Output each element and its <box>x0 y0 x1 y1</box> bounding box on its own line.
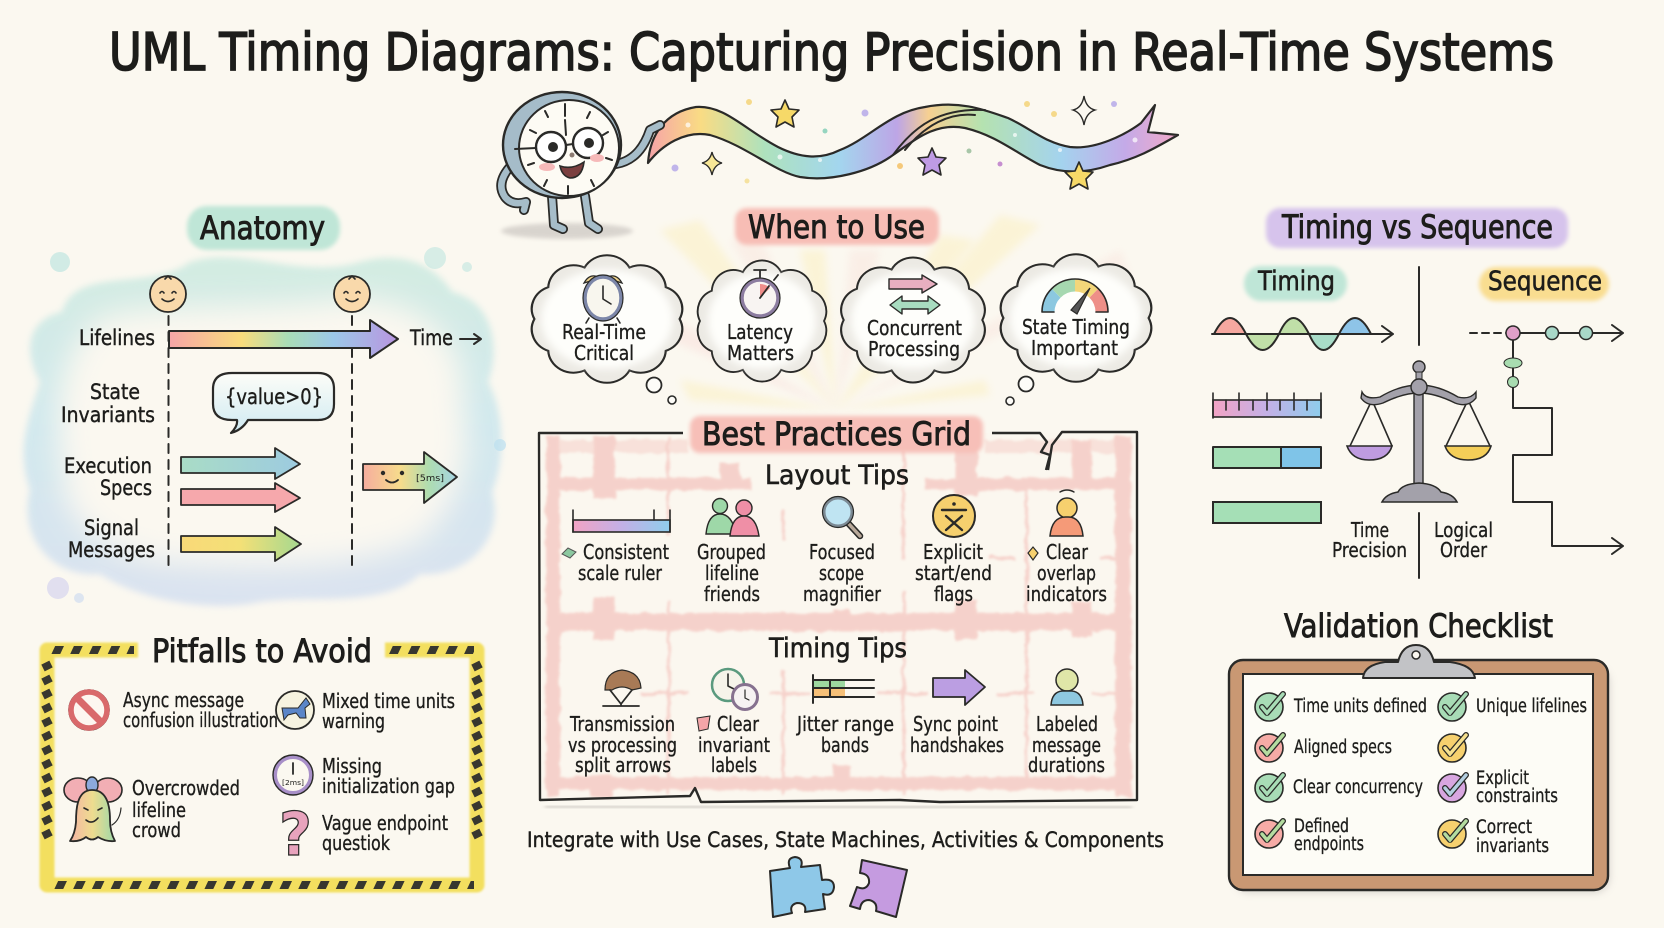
check: unlabeled yellow <box>1438 734 1466 762</box>
watercolor cloud background <box>24 247 506 606</box>
text: mixed time units: warning <box>322 709 385 733</box>
label: Execution Specs: Execution <box>64 454 152 478</box>
text: mixed time units: Mixed time units <box>322 689 455 713</box>
text: mixed time units <box>322 689 455 733</box>
tip: focused scope magnifier: Focused <box>809 540 875 564</box>
panel: anatomy <box>24 206 506 606</box>
text: overcrowded lifeline: crowd <box>132 818 181 842</box>
subheading: Layout Tips: Layout Tips <box>765 460 909 491</box>
label: Signal Messages <box>68 516 155 562</box>
check: explicit constraints: Explicit <box>1476 768 1529 789</box>
text: vague endpoint <box>322 811 448 855</box>
text: overcrowded lifeline <box>132 776 240 842</box>
label: Execution Specs <box>64 454 152 500</box>
balance scale <box>1347 361 1491 502</box>
tip: clear invariant labels: Clear <box>717 712 760 736</box>
rainbow timeline ribbon <box>648 105 1178 178</box>
icon: gauge <box>1042 279 1108 314</box>
tip: transmission vs processing <box>568 670 677 777</box>
thought cloud: concurrent processing: Concurrent <box>867 316 962 340</box>
tip: labeled message durations <box>1028 669 1105 777</box>
check: time units defined: Time units defined <box>1293 696 1427 717</box>
label: Signal Messages: Messages <box>68 538 155 562</box>
label: State Invariants: State <box>90 380 140 404</box>
tip: clear overlap indicators <box>1026 490 1107 606</box>
thought cloud: real-time critical <box>532 255 682 404</box>
panel: timing vs sequence <box>1212 208 1623 578</box>
lifeline heads and dashed lines <box>150 276 370 568</box>
text: missing initialization <box>322 754 455 798</box>
icon: overcrowded ghost <box>64 777 122 841</box>
red gingham grid wash <box>546 436 1131 797</box>
thought cloud: state timing important: State Timing <box>1022 315 1130 339</box>
tip: consistent scale ruler <box>562 510 670 585</box>
check: unique lifelines <box>1438 693 1587 721</box>
clipboard <box>1229 645 1610 893</box>
tip: clear invariant labels: invariant <box>698 733 770 757</box>
sunburst behind When to Use <box>640 215 1130 410</box>
tip: focused scope magnifier: scope <box>819 561 864 585</box>
thought cloud: latency matters: Latency <box>727 320 793 344</box>
text: async message: confusion illustration <box>123 708 278 732</box>
label: logical order: Logical <box>1434 518 1493 542</box>
heading: Timing vs Sequence: Timing vs Sequence <box>1281 208 1553 246</box>
check: unique lifelines: Unique lifelines <box>1476 696 1587 717</box>
text: overcrowded lifeline: lifeline <box>132 798 186 822</box>
clock character <box>501 92 660 239</box>
timing waveform <box>1212 318 1393 350</box>
panel: pitfalls to avoid <box>43 632 481 885</box>
tip: focused scope magnifier: magnifier <box>803 582 882 606</box>
thought cloud: concurrent processing: Processing <box>868 337 960 361</box>
check: aligned specs: Aligned specs <box>1294 737 1392 758</box>
heading: When to Use: When to Use <box>748 208 925 246</box>
signal arrow <box>181 527 301 561</box>
check: correct invariants: Correct <box>1476 817 1532 838</box>
panel: when to use <box>532 208 1151 405</box>
check: defined endpoints: endpoints <box>1294 834 1364 855</box>
heading: Validation Checklist: Validation Checklist <box>1284 607 1553 645</box>
check: aligned specs <box>1255 734 1392 762</box>
smiling 5ms message arrow: [5ms] <box>416 474 444 484</box>
speech bubble: value constraint: {value>0} <box>225 385 323 409</box>
check: time units defined <box>1255 693 1427 721</box>
panel: validation checklist <box>1229 607 1610 893</box>
tip: grouped lifeline friends <box>697 498 766 606</box>
tip: grouped lifeline friends: Grouped <box>697 540 766 564</box>
tip: transmission vs processing: split arrows <box>575 753 671 777</box>
icon: puzzle pieces <box>770 857 907 917</box>
center divider <box>1418 267 1420 345</box>
check: explicit constraints <box>1438 768 1558 807</box>
label: State Invariants: Invariants <box>61 403 155 427</box>
check: clear concurrency: Clear concurrency <box>1293 777 1423 798</box>
label: Time: Time <box>409 326 453 350</box>
thought cloud: real-time critical: Critical <box>574 341 634 365</box>
subheading: Timing Tips: Timing Tips <box>768 633 907 664</box>
icon: question mark: ? <box>279 800 312 870</box>
thought cloud: state timing important: Important <box>1031 336 1118 360</box>
tip: jitter range bands: Jitter range <box>795 712 894 736</box>
panel: best practices grid <box>539 415 1137 808</box>
thought cloud: latency matters: Matters <box>727 341 794 365</box>
tip: transmission vs processing: vs processing <box>568 733 677 757</box>
execution arrows <box>181 448 300 512</box>
check: correct invariants <box>1438 817 1549 857</box>
tip: clear invariant labels <box>697 669 770 777</box>
tip: sync point handshakes <box>910 670 1004 757</box>
check: clear concurrency <box>1255 774 1423 802</box>
label: time precision <box>1332 518 1407 562</box>
icon: parallel arrows <box>889 275 940 314</box>
clock mascot with rainbow ribbon <box>501 92 1178 239</box>
time arrow <box>169 320 398 358</box>
tip: grouped lifeline friends: lifeline <box>705 561 759 585</box>
sequence lifeline diagram <box>1470 325 1623 554</box>
integration caption: Integrate with Use Cases, State Machines, Activities & Components <box>527 828 1164 852</box>
label: Execution Specs: Specs <box>100 476 152 500</box>
tip: jitter range bands <box>795 675 894 757</box>
tip: transmission vs processing: Transmission <box>569 712 675 736</box>
timing bar: full <box>1213 502 1321 523</box>
icon: stopwatch <box>740 270 780 318</box>
check: defined endpoints <box>1255 816 1364 855</box>
tip: sync point handshakes: Sync point <box>913 712 998 736</box>
tip: clear overlap indicators: indicators <box>1026 582 1107 606</box>
heading: Pitfalls to Avoid: Pitfalls to Avoid <box>152 632 372 670</box>
cracked frame outline <box>539 432 1137 808</box>
tip: grouped lifeline friends: friends <box>704 582 760 606</box>
speech bubble: value constraint <box>213 373 334 433</box>
tip: labeled message durations: Labeled <box>1036 712 1098 736</box>
heading: Anatomy: Anatomy <box>200 209 325 247</box>
check: explicit constraints: constraints <box>1476 786 1558 807</box>
tip: clear overlap indicators: overlap <box>1037 561 1096 585</box>
tip: explicit start/end flags: flags <box>934 582 973 606</box>
thought cloud: real-time critical: Real-Time <box>562 320 646 344</box>
thought cloud: latency matters <box>698 260 826 382</box>
text: overcrowded lifeline: Overcrowded <box>132 776 240 800</box>
text: missing initialization: Missing <box>322 754 382 778</box>
tip: jitter range bands: bands <box>821 733 869 757</box>
text: async message: Async message <box>123 688 244 712</box>
icon: mixed time units <box>276 691 314 729</box>
thought cloud: concurrent processing <box>841 257 985 383</box>
icon: async prohibited <box>69 690 109 730</box>
tip: labeled message durations: message <box>1032 733 1101 757</box>
label: Lifelines: Lifelines <box>79 326 155 350</box>
tip: clear overlap indicators: Clear <box>1046 540 1089 564</box>
text: missing initialization: initialization gap <box>322 774 455 798</box>
heading: Best Practices Grid: Best Practices Grid <box>702 415 971 453</box>
label: logical order <box>1434 518 1493 562</box>
check: correct invariants: invariants <box>1476 836 1549 857</box>
icon: missing initialization clock: [2ms] <box>282 779 304 787</box>
stars and sparkles <box>672 96 1117 189</box>
text: vague endpoint: Vague endpoint <box>322 811 448 835</box>
tip: focused scope magnifier <box>803 496 882 606</box>
smiling 5ms message arrow <box>363 452 457 503</box>
icon: missing initialization clock <box>273 755 313 795</box>
icon: alarm clock <box>583 275 623 323</box>
label: time precision: Precision <box>1332 538 1407 562</box>
tip: labeled message durations: durations <box>1028 753 1105 777</box>
hazard tape border <box>43 650 481 885</box>
tip: sync point handshakes: handshakes <box>910 733 1004 757</box>
timing ruler <box>1213 393 1321 418</box>
tip: consistent scale ruler: scale ruler <box>578 561 663 585</box>
subheading: Timing: Timing <box>1257 266 1335 297</box>
label: State Invariants <box>61 380 155 427</box>
tip: explicit start/end flags: start/end <box>915 561 992 585</box>
tip: explicit start/end flags <box>915 495 992 606</box>
tip: explicit start/end flags: Explicit <box>923 540 983 564</box>
paper base <box>540 433 1136 799</box>
label: Signal Messages: Signal <box>84 516 139 540</box>
subheading: Sequence: Sequence <box>1488 266 1602 297</box>
timing bar: split <box>1213 447 1321 468</box>
check: defined endpoints: Defined <box>1294 816 1349 837</box>
tip: consistent scale ruler: Consistent <box>583 540 669 564</box>
thought cloud: state timing important <box>1001 254 1151 405</box>
text: async message <box>123 688 278 732</box>
tip: clear invariant labels: labels <box>711 753 757 777</box>
label: time precision: Time <box>1350 518 1389 542</box>
text: vague endpoint: questiok <box>322 831 390 855</box>
label: logical order: Order <box>1440 538 1488 562</box>
